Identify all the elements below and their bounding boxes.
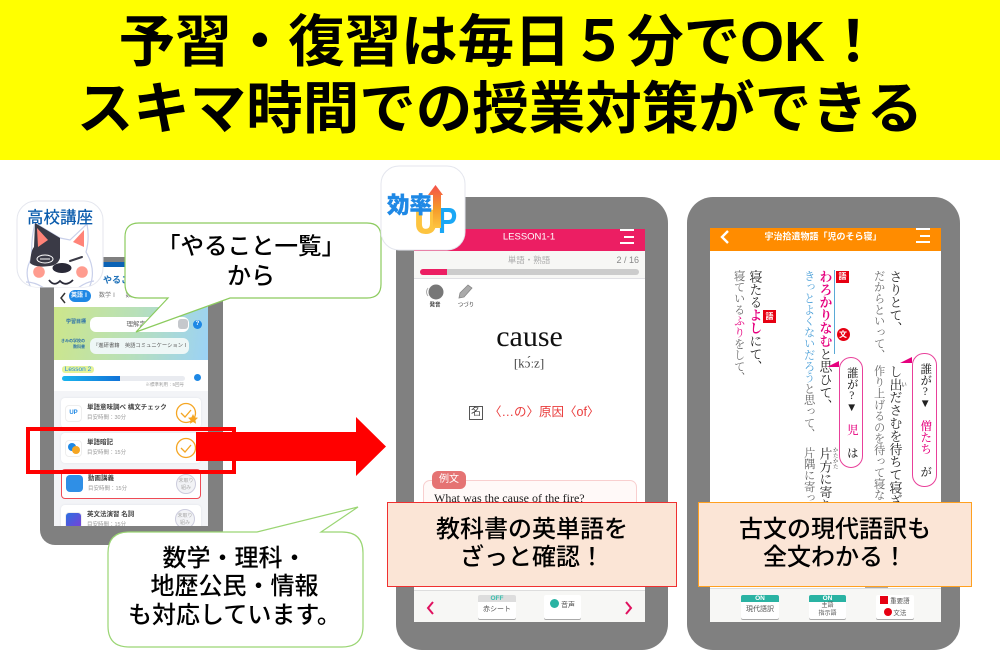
label [818, 602, 836, 617]
page count: 2 / 16 [616, 255, 639, 265]
list background [54, 391, 208, 526]
textbook selector: 『進研書籍 英語コミュニケーション I [93, 343, 186, 349]
card name: 英文法演習 名詞 [87, 511, 134, 518]
pill text: 誰が?▼ [919, 363, 931, 410]
ruby: i: い [901, 382, 907, 388]
bottom toolbar [414, 590, 645, 622]
help icon [193, 320, 202, 329]
vertical text: translation column 1: だからといって、 [873, 270, 885, 360]
goal label: 学習目標 [66, 319, 86, 325]
part of speech [469, 406, 483, 420]
story title: 宇治拾遺物語「児のそら寝」 [764, 232, 882, 242]
active tab: 英語Ⅰ [71, 293, 89, 299]
scroll handle [865, 586, 888, 588]
lesson title: LESSON1-1 [503, 231, 555, 242]
icon: pronunciation [426, 284, 444, 308]
not started badge [175, 509, 195, 529]
label: 発音 [429, 302, 441, 308]
check badge [176, 438, 196, 458]
callout: from the to-do list [124, 222, 382, 333]
icon: memorising [65, 440, 82, 457]
on tag: ON [755, 595, 765, 602]
pill answer: 児 [846, 424, 858, 436]
vertical text: original column 5: 寝たる よし にて、 [747, 270, 761, 373]
card name: 単語暗記 [87, 439, 113, 446]
card time: 目安時間：15分 [88, 486, 127, 492]
icon: efficiency up [65, 405, 82, 422]
icon: high school course app [16, 200, 104, 288]
card: vocabulary lookup [61, 398, 201, 428]
card: video lesson [61, 469, 201, 499]
label: 指示語 [818, 611, 836, 617]
label: 現代語訳 [746, 606, 774, 613]
orange header [710, 228, 941, 251]
button: modern translation on [741, 595, 779, 619]
callout: other subjects: 地歴公民・情報 [150, 573, 318, 600]
help icon: ? [196, 321, 199, 327]
pronunciation: [kɔ́ːz] [514, 356, 544, 370]
settings gradient panel [54, 307, 208, 360]
vertical text: original column 4: 片方に寄りて [817, 447, 831, 524]
bottom toolbar [710, 588, 941, 622]
on tag [809, 595, 846, 602]
card: vocabulary memorising [61, 433, 201, 463]
back chevron [60, 292, 66, 304]
lesson label: Lesson 2 [65, 366, 91, 373]
key word row: 重要語 [890, 598, 910, 605]
pencil [458, 284, 472, 298]
caption line 1: 古文の現代語訳も [739, 516, 931, 543]
chevron: next [625, 601, 632, 615]
panel: phone with English vocabulary screen [396, 197, 668, 650]
button: audio: 音声 [561, 602, 575, 609]
vertical text: original column 2: し出ださむを待ちて寝ざらむも [887, 365, 901, 546]
card name: 単語意味調べ 構文チェック [87, 404, 167, 411]
callout: other subjects: も対応しています。 [128, 602, 341, 629]
card time: 目安時間：15分 [87, 450, 126, 456]
definition: 〈…の〉原因〈of〉 [489, 405, 599, 419]
pill pointer 2 [827, 361, 839, 367]
button: key words legend [876, 595, 914, 619]
back chevron [720, 230, 729, 244]
not started badge: 未取り組み [177, 513, 192, 526]
icon: efficiency up app [380, 166, 466, 250]
icon: efficiency up app: P [438, 200, 457, 241]
callout: other subjects: 数学・理科・ [162, 545, 306, 572]
on tag [741, 595, 779, 602]
off tag [478, 595, 516, 602]
underline marker [834, 270, 835, 354]
screen heading: やること一覧 [103, 275, 157, 285]
ruby: katakata: かたかた [832, 447, 838, 469]
vocabulary screen [414, 229, 645, 622]
icon: spelling [458, 284, 474, 308]
title line 1: 予習・復習は毎日５分でOK！ [119, 10, 881, 73]
vertical text: original column 3: わろかりなむ と思ひて、 [817, 270, 831, 412]
caption line 2: 全文わかる！ [763, 544, 907, 571]
icon: efficiency up app: 効率 [387, 193, 432, 218]
goal selector: 理解定着 [126, 321, 152, 328]
usage note: ※標準利用：5回号 [145, 382, 184, 387]
progress bar [420, 269, 639, 275]
section label: 単語・熟語 [508, 255, 550, 265]
card: grammar drill [61, 505, 201, 535]
goal selector [90, 317, 189, 332]
check badge [176, 402, 198, 424]
vertical text: translation column 3: きっとよくないだろう と思って、 [803, 270, 815, 440]
arrow: red arrow to the vocabulary screen [196, 417, 386, 476]
icon: video [66, 475, 83, 492]
phone screen: to-do list [54, 262, 208, 526]
grammar row [884, 608, 906, 617]
callout: other subjects [107, 506, 364, 648]
callout: from the to-do list: 「やること一覧」 [157, 233, 345, 259]
speaker dot [550, 599, 559, 608]
subject tabs [69, 290, 164, 302]
textbook selector [90, 338, 189, 354]
card name: 動画講義 [88, 475, 114, 482]
highlight frame on vocabulary memorising row [26, 427, 236, 474]
app top strip [54, 262, 208, 267]
label: つづり [458, 302, 474, 308]
vertical text: translation column 2: 作り上げるのを待って寝ないのも [873, 365, 885, 534]
pill particle: が [919, 466, 931, 478]
speaker head [426, 284, 444, 300]
menu icon [916, 228, 930, 243]
headword: cause [496, 320, 563, 353]
progress section [414, 251, 645, 279]
title line 2: スキマ時間での授業対策ができる [77, 77, 923, 140]
label: 主語 [821, 603, 834, 609]
on tag: ON [823, 595, 832, 602]
badge: vocabulary 2: 語 [766, 312, 774, 321]
label: 赤シート [483, 606, 511, 613]
callout: from the to-do list: から [227, 263, 275, 290]
button: red sheet off [478, 595, 516, 619]
panel: phone with to-do list screen [40, 257, 223, 545]
textbook label: きみの学校の教科書 [61, 338, 85, 349]
part of speech: 名 [471, 407, 481, 418]
icon: high school course app: 高校講座 [27, 208, 93, 227]
button: audio [544, 595, 581, 619]
progress bar [62, 376, 185, 381]
vertical text: original column 1: さりとて、 [887, 270, 901, 334]
label box: classical text caption [698, 502, 972, 587]
icon: efficiency up app: U [415, 204, 437, 240]
vertical text: translation column 4: 片隅に寄って [803, 447, 815, 515]
active tab [69, 290, 91, 302]
card time: 目安時間：30分 [87, 415, 126, 421]
menu icon [620, 229, 634, 244]
label box: vocabulary caption [387, 502, 677, 587]
pill: who, child [839, 357, 863, 468]
grammar row: 文法 [893, 610, 906, 617]
badge: vocabulary 2 [763, 310, 776, 323]
example card [423, 480, 637, 570]
badge: grammar [836, 328, 850, 340]
pill particle: は [846, 447, 858, 458]
badge: grammar: 文 [839, 330, 847, 338]
icon: efficiency up: UP [69, 410, 78, 416]
example sentence: What was the cause of the fire? [434, 491, 585, 505]
chevron: previous [426, 601, 434, 615]
pill pointer 1 [900, 357, 912, 363]
caption line 2: ざっと確認！ [460, 544, 604, 571]
key word row [880, 596, 910, 605]
badge: vocabulary 1: 語 [838, 272, 846, 281]
pill answer: 僧たち [919, 420, 931, 454]
inactive tabs: 数学Ⅰ 数学Ⅱ 国語 [99, 293, 164, 299]
not started badge: 未取り組み [178, 478, 194, 491]
pill text: 誰が?▼ [846, 367, 858, 414]
banner: yellow title band [0, 0, 1000, 160]
pill: who, monks [912, 353, 937, 487]
badge: vocabulary 1 [836, 271, 849, 283]
lesson progress [54, 360, 208, 390]
example tag: 例文 [439, 474, 459, 485]
expand icon [194, 374, 201, 381]
caption line 1: 教科書の英単語を [436, 516, 628, 543]
classical text screen [710, 228, 941, 622]
not started badge [176, 474, 196, 494]
icon: grammar [65, 512, 82, 529]
pink header [414, 229, 645, 251]
example tag [432, 471, 466, 489]
vertical text: translation column 5: 寝ている ふり をして、 [733, 270, 745, 383]
button: subject on [809, 595, 846, 619]
panel: phone with classical Japanese screen [687, 197, 960, 650]
off tag: OFF [490, 595, 504, 602]
dropdown button [178, 319, 188, 329]
